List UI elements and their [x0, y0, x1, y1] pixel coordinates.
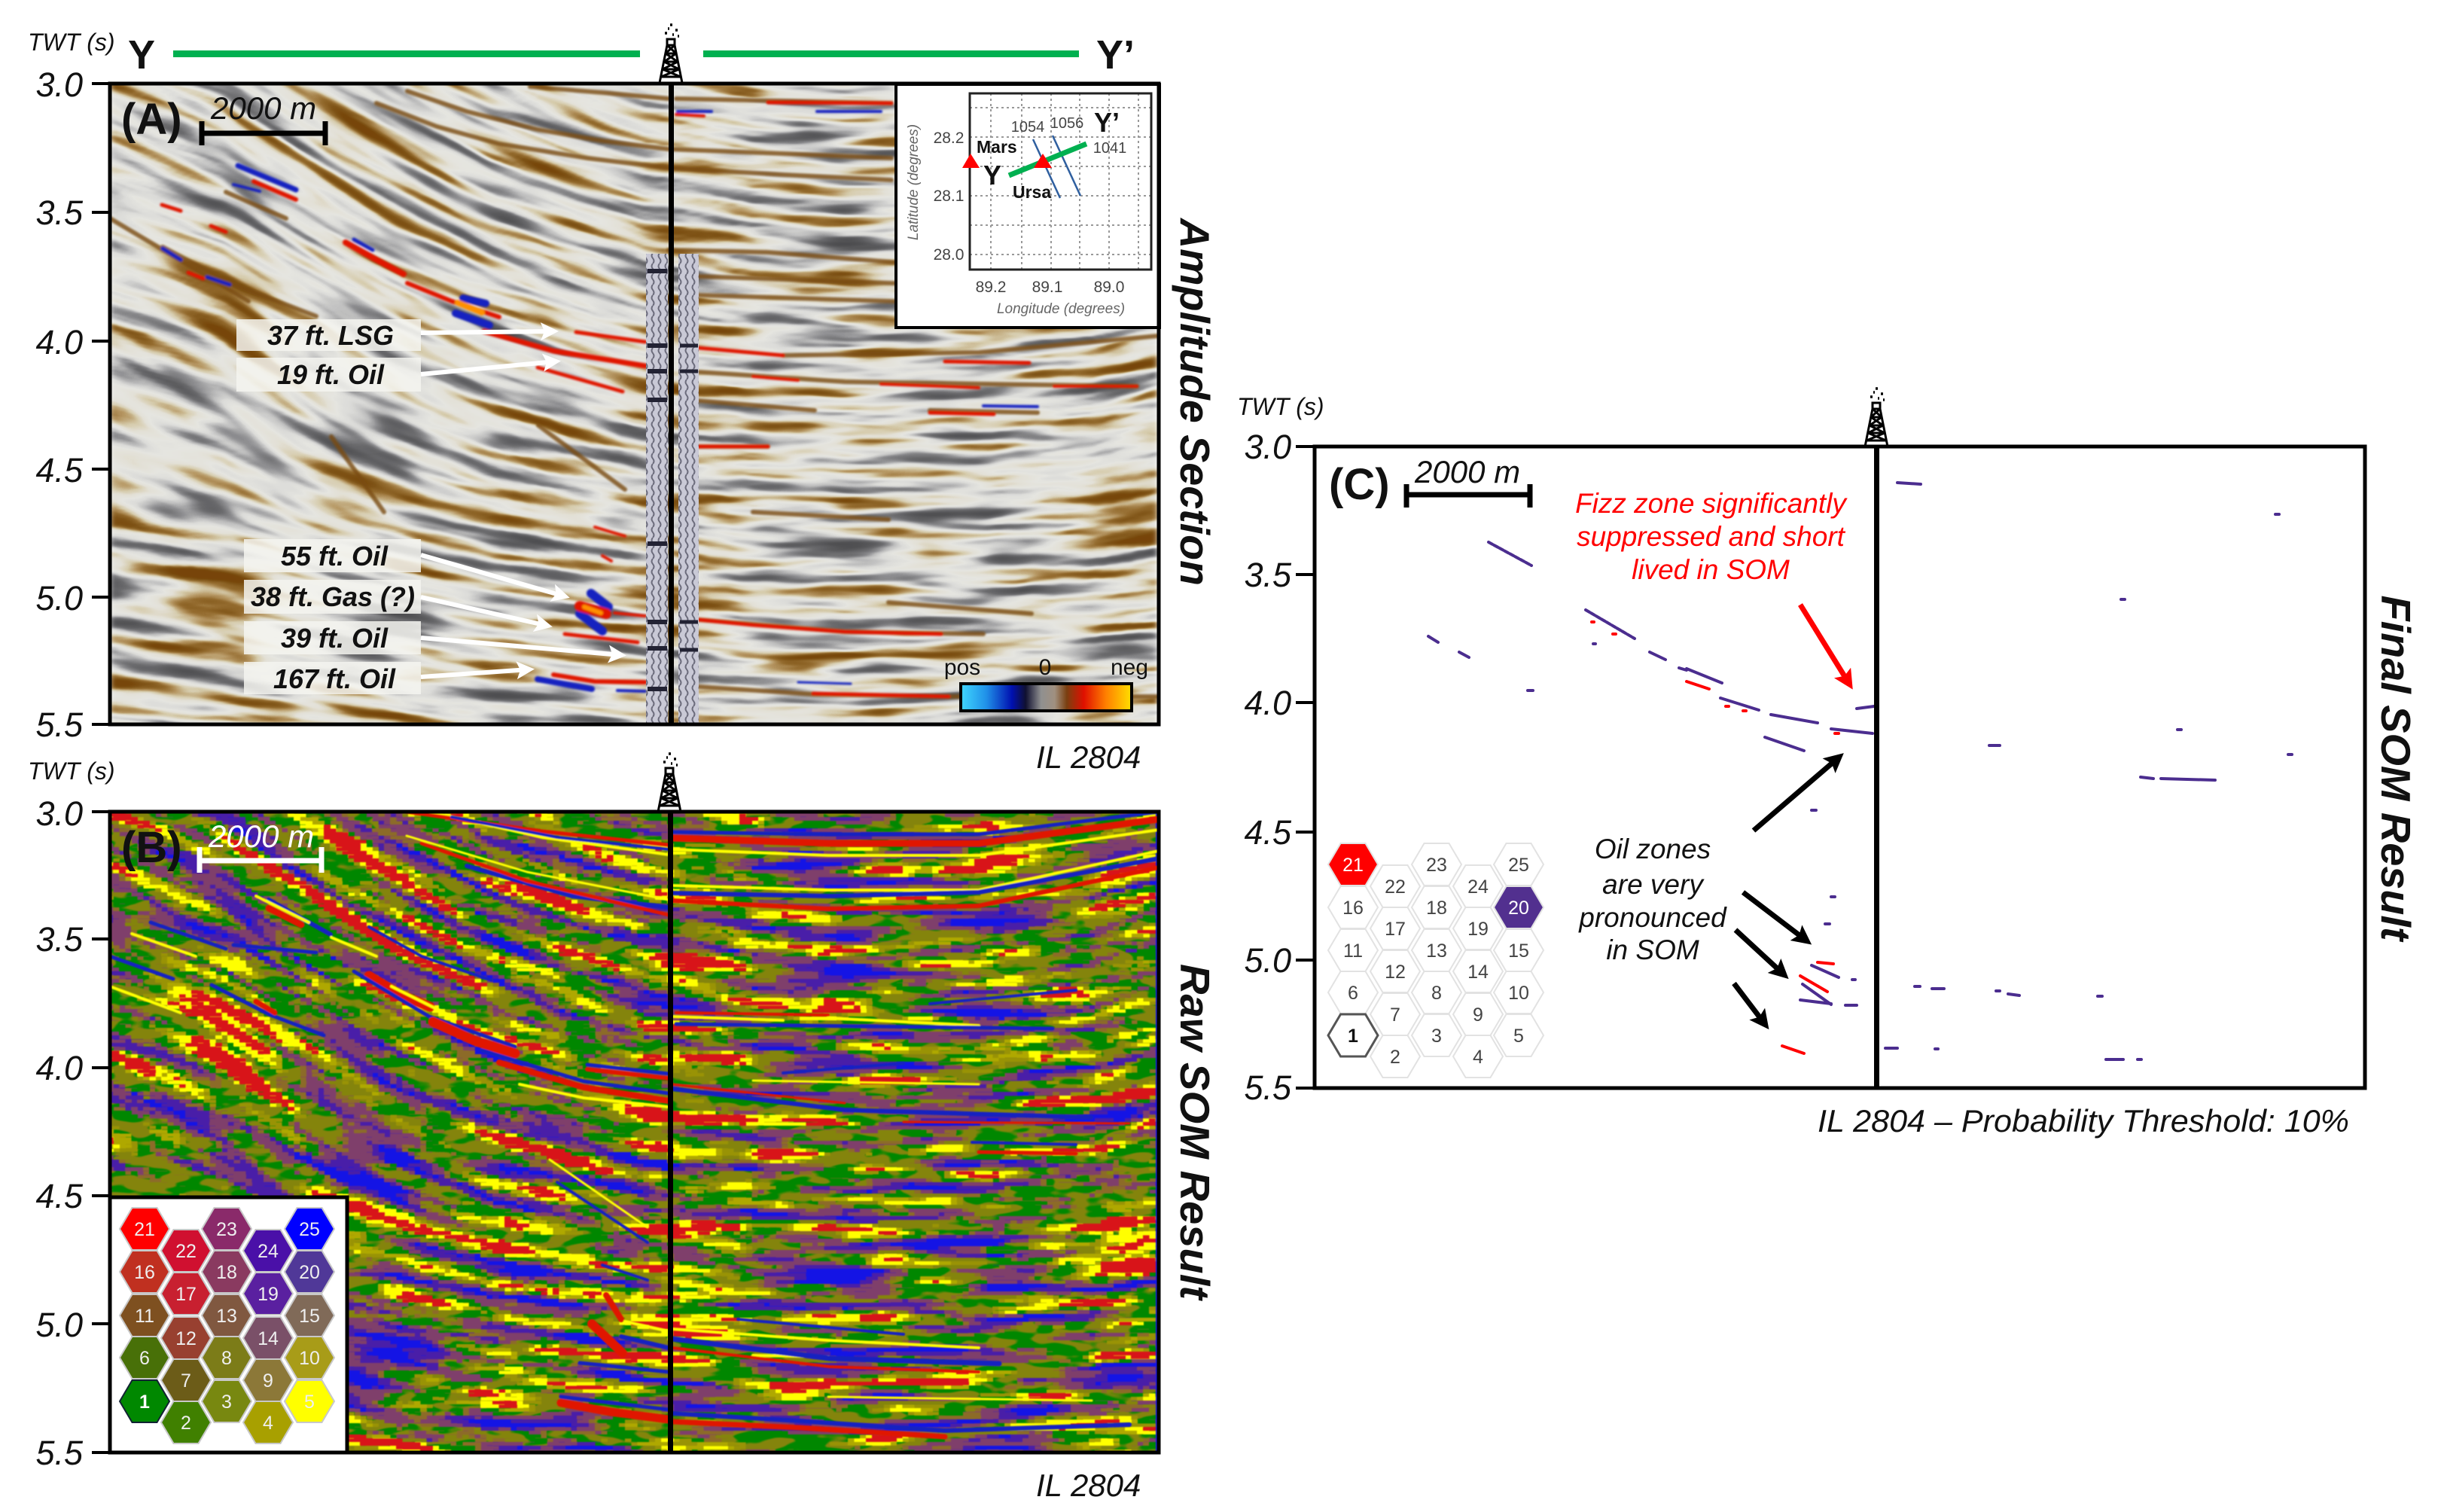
purple SOM neuron 20 events: [1428, 483, 2292, 1059]
depth axis A: 5.5: [35, 706, 84, 744]
TWT axis label, panel C: TWT (s): [1237, 393, 1324, 420]
SOM hexagon legend, selected neurons: 6: [1348, 983, 1358, 1004]
SOM hexagon colour legend: 25: [299, 1219, 320, 1240]
depth axis B: 3.5: [35, 920, 84, 959]
SOM hexagon legend, selected neurons: 15: [1508, 940, 1529, 962]
icon: derrick, panel C: [1865, 389, 1888, 447]
black annotation: oil zones: pronounced: [1578, 902, 1727, 933]
scale bar C: [1406, 454, 1530, 508]
well log strip, right: [678, 254, 699, 724]
SOM hexagon legend, selected neurons: 22: [1385, 876, 1406, 898]
green section line, left: [173, 50, 640, 57]
SOM hexagon colour legend: 20: [299, 1262, 320, 1283]
SOM hexagon colour legend: 1: [139, 1392, 150, 1413]
SOM hexagon colour legend: 3: [221, 1392, 232, 1413]
red annotation: fizz zone: suppressed and short: [1577, 521, 1846, 552]
panel letter A: (A): [121, 95, 182, 144]
depth axis C: [1244, 428, 1315, 1107]
SOM hexagon legend, selected neurons: 3: [1431, 1026, 1442, 1047]
scale bar B: 2000 m: [208, 818, 314, 854]
SOM hexagon legend, selected neurons: 8: [1431, 983, 1442, 1004]
SOM hexagon legend, selected neurons: 7: [1390, 1004, 1400, 1026]
location map inset: 28.0: [934, 246, 964, 264]
label 37 ft LSG: 37 ft. LSG: [267, 320, 394, 351]
SOM hexagon legend, selected neurons: [1328, 843, 1544, 1078]
panel letter B: (B): [121, 823, 182, 872]
location map inset: 1041: [1093, 140, 1126, 157]
SOM hexagon colour legend: 13: [216, 1306, 237, 1327]
SOM hexagon legend, selected neurons: 5: [1513, 1026, 1524, 1047]
depth axis C: 3.0: [1244, 428, 1291, 466]
SOM hexagon colour legend: 5: [304, 1392, 315, 1413]
frame A: [110, 84, 1159, 724]
SOM hexagon legend, selected neurons: 4: [1473, 1047, 1483, 1068]
strong reflectors, panel A: [110, 87, 1159, 697]
SOM hexagon colour legend: 11: [135, 1306, 154, 1327]
depth axis A: 3.5: [35, 194, 84, 232]
SOM hexagon legend, selected neurons: 13: [1426, 940, 1447, 962]
black annotation: oil zones: are very: [1602, 869, 1705, 900]
rotated title: Amplitude Section: Amplitude Section: [1172, 217, 1218, 586]
icon: derrick, panel A: [660, 25, 682, 83]
location map inset: 89.2: [976, 279, 1006, 296]
red annotation: fizz zone: [1575, 488, 1848, 585]
SOM hexagon legend, selected neurons: 25: [1508, 855, 1529, 876]
green section line, right: [703, 50, 1079, 57]
depth axis B: 5.5: [35, 1434, 84, 1472]
SOM hexagon colour legend: 8: [221, 1348, 232, 1369]
SOM hexagon colour legend: 14: [258, 1328, 279, 1349]
depth axis C: 5.0: [1244, 941, 1291, 980]
depth axis C: 3.5: [1244, 556, 1292, 594]
label 167 ft Oil: [244, 662, 421, 694]
location map inset: Y: [983, 160, 1001, 191]
seismic amplitude texture: [110, 81, 1159, 727]
caption IL 2804, panel B: IL 2804: [1036, 1468, 1141, 1503]
SOM hexagon legend, selected neurons: 20: [1508, 898, 1529, 919]
TWT axis label, panel A: TWT (s): [28, 29, 114, 56]
label 37 ft LSG: [236, 319, 421, 351]
label 167 ft Oil: 167 ft. Oil: [273, 663, 396, 694]
black annotation: oil zones: in SOM: [1606, 934, 1699, 965]
SOM hexagon colour legend: 6: [139, 1348, 150, 1369]
label 55 ft Oil: [244, 539, 421, 572]
depth axis B: 5.0: [35, 1306, 83, 1344]
rotated title: Raw SOM Result: Raw SOM Result: [1172, 964, 1218, 1302]
location map inset: 89.1: [1032, 279, 1062, 296]
SOM hexagon legend, selected neurons: 2: [1390, 1047, 1400, 1068]
colour bar legend: 0: [1039, 655, 1051, 680]
label 19 ft Oil: 19 ft. Oil: [277, 359, 385, 390]
label 19 ft Oil: [236, 358, 421, 392]
scale bar C: 2000 m: [1414, 454, 1520, 489]
label 39 ft Oil: [244, 621, 421, 654]
SOM hexagon colour legend: [110, 1197, 347, 1453]
black annotation: oil zones: [1578, 834, 1727, 965]
well track line B: [668, 812, 673, 1453]
SOM hexagon colour legend: 16: [134, 1262, 155, 1283]
SOM hexagon legend, selected neurons: 18: [1426, 898, 1447, 919]
SOM hexagon legend, selected neurons: 24: [1467, 876, 1489, 898]
colour bar legend: pos: [944, 655, 980, 680]
depth axis C: 4.5: [1244, 813, 1292, 852]
SOM hexagon colour legend: 4: [263, 1413, 273, 1434]
rotated title: Final SOM Result: Final SOM Result: [2372, 595, 2419, 943]
panel C: final SOM result: [1315, 447, 2365, 1088]
caption IL 2804, panel A: IL 2804: [1036, 739, 1141, 775]
SOM hexagon colour legend: 21: [134, 1219, 155, 1240]
SOM hexagon colour legend: 12: [175, 1328, 197, 1349]
depth axis A: 4.0: [35, 323, 83, 361]
SOM hexagon legend, selected neurons: 21: [1342, 855, 1364, 876]
colour bar legend: neg: [1111, 655, 1148, 680]
SOM hexagon colour legend: 7: [181, 1370, 191, 1392]
SOM hexagon legend, selected neurons: 12: [1385, 962, 1406, 983]
section endpoint Y prime: Y’: [1096, 32, 1135, 78]
depth axis B: 4.0: [35, 1049, 83, 1087]
location map inset: Ursa: [1013, 182, 1051, 202]
SOM hexagon legend, selected neurons: 17: [1385, 919, 1406, 940]
well log strip, left: [646, 254, 668, 724]
location map inset: Y’: [1094, 107, 1120, 138]
location map inset: Longitude (degrees): [997, 301, 1125, 317]
SOM hexagon legend, selected neurons: 11: [1343, 940, 1363, 962]
red SOM neuron 21 events: [1592, 622, 1839, 1053]
SOM hexagon colour legend: 19: [258, 1284, 279, 1305]
SOM hexagon legend, selected neurons: 23: [1426, 855, 1447, 876]
icon: derrick, panel B: [658, 754, 681, 812]
label 38 ft Gas: 38 ft. Gas (?): [251, 581, 415, 612]
location map inset: 1056: [1050, 115, 1083, 132]
depth axis A: 3.0: [35, 66, 83, 104]
depth axis C: 5.5: [1244, 1068, 1292, 1107]
panel A: amplitude section: [110, 81, 1160, 727]
SOM hexagon colour legend: 9: [263, 1370, 273, 1392]
depth axis C: 4.0: [1244, 684, 1291, 722]
SOM hexagon colour legend: 10: [299, 1348, 320, 1369]
SOM hexagon colour legend: 17: [175, 1284, 197, 1305]
depth axis B: 4.5: [35, 1177, 84, 1215]
location map inset: [896, 84, 1160, 328]
red annotation: fizz zone: Fizz zone significantly: [1575, 488, 1848, 519]
location map inset: 28.1: [934, 187, 964, 205]
SOM hexagon legend, selected neurons: 1: [1348, 1026, 1358, 1047]
depth axis B: [35, 794, 110, 1472]
arrows from labels to reflectors: [421, 331, 621, 677]
depth axis A: 4.5: [35, 451, 84, 489]
red arrow to fizz zone: [1800, 605, 1849, 684]
SOM hexagon colour legend: 15: [299, 1306, 320, 1327]
location map inset: 89.0: [1094, 279, 1124, 296]
SOM hexagon legend, selected neurons: 16: [1342, 898, 1364, 919]
location map inset: Latitude (degrees): [906, 124, 922, 240]
well track line: [669, 84, 674, 724]
location map inset: 28.2: [934, 130, 964, 147]
label 55 ft Oil: 55 ft. Oil: [281, 541, 389, 572]
panel B: raw SOM result: [110, 809, 1159, 1455]
well track line C: [1874, 447, 1879, 1088]
TWT axis label, panel B: TWT (s): [28, 758, 114, 785]
caption: probability threshold: IL 2804 – Probability Threshold: 10%: [1818, 1103, 2349, 1139]
scale bar A: [202, 90, 325, 145]
panel letter C: (C): [1329, 460, 1390, 509]
SOM hexagon colour legend: 18: [216, 1262, 237, 1283]
red annotation: fizz zone: lived in SOM: [1632, 554, 1790, 585]
section endpoint Y: Y: [128, 32, 155, 78]
SOM hexagon legend, selected neurons: 19: [1467, 919, 1489, 940]
SOM hexagon legend, selected neurons: 9: [1473, 1004, 1483, 1026]
depth axis B: 3.0: [35, 794, 83, 833]
depth axis A: 5.0: [35, 579, 83, 617]
SOM hexagon colour legend: 23: [216, 1219, 237, 1240]
label 39 ft Oil: 39 ft. Oil: [281, 623, 389, 654]
location map inset: Mars: [977, 137, 1017, 157]
SOM hexagon colour legend: 2: [181, 1413, 191, 1434]
frame B: [110, 812, 1159, 1453]
scale bar B: [200, 818, 322, 873]
strong SOM reflectors: [110, 812, 1159, 1437]
SOM hexagon legend, selected neurons: 14: [1467, 962, 1489, 983]
location map inset: 1054: [1011, 119, 1044, 136]
black arrows to oil zones: [1734, 758, 1839, 1024]
colour bar legend: [944, 655, 1148, 711]
SOM hexagon colour legend: 24: [258, 1241, 279, 1262]
black annotation: oil zones: Oil zones: [1595, 834, 1711, 864]
SOM hexagon colour legend: 22: [175, 1241, 197, 1262]
scale bar A: 2000 m: [210, 90, 316, 126]
SOM classified texture: [110, 809, 1159, 1455]
SOM hexagon legend, selected neurons: 10: [1508, 983, 1529, 1004]
depth axis A: [35, 66, 110, 744]
